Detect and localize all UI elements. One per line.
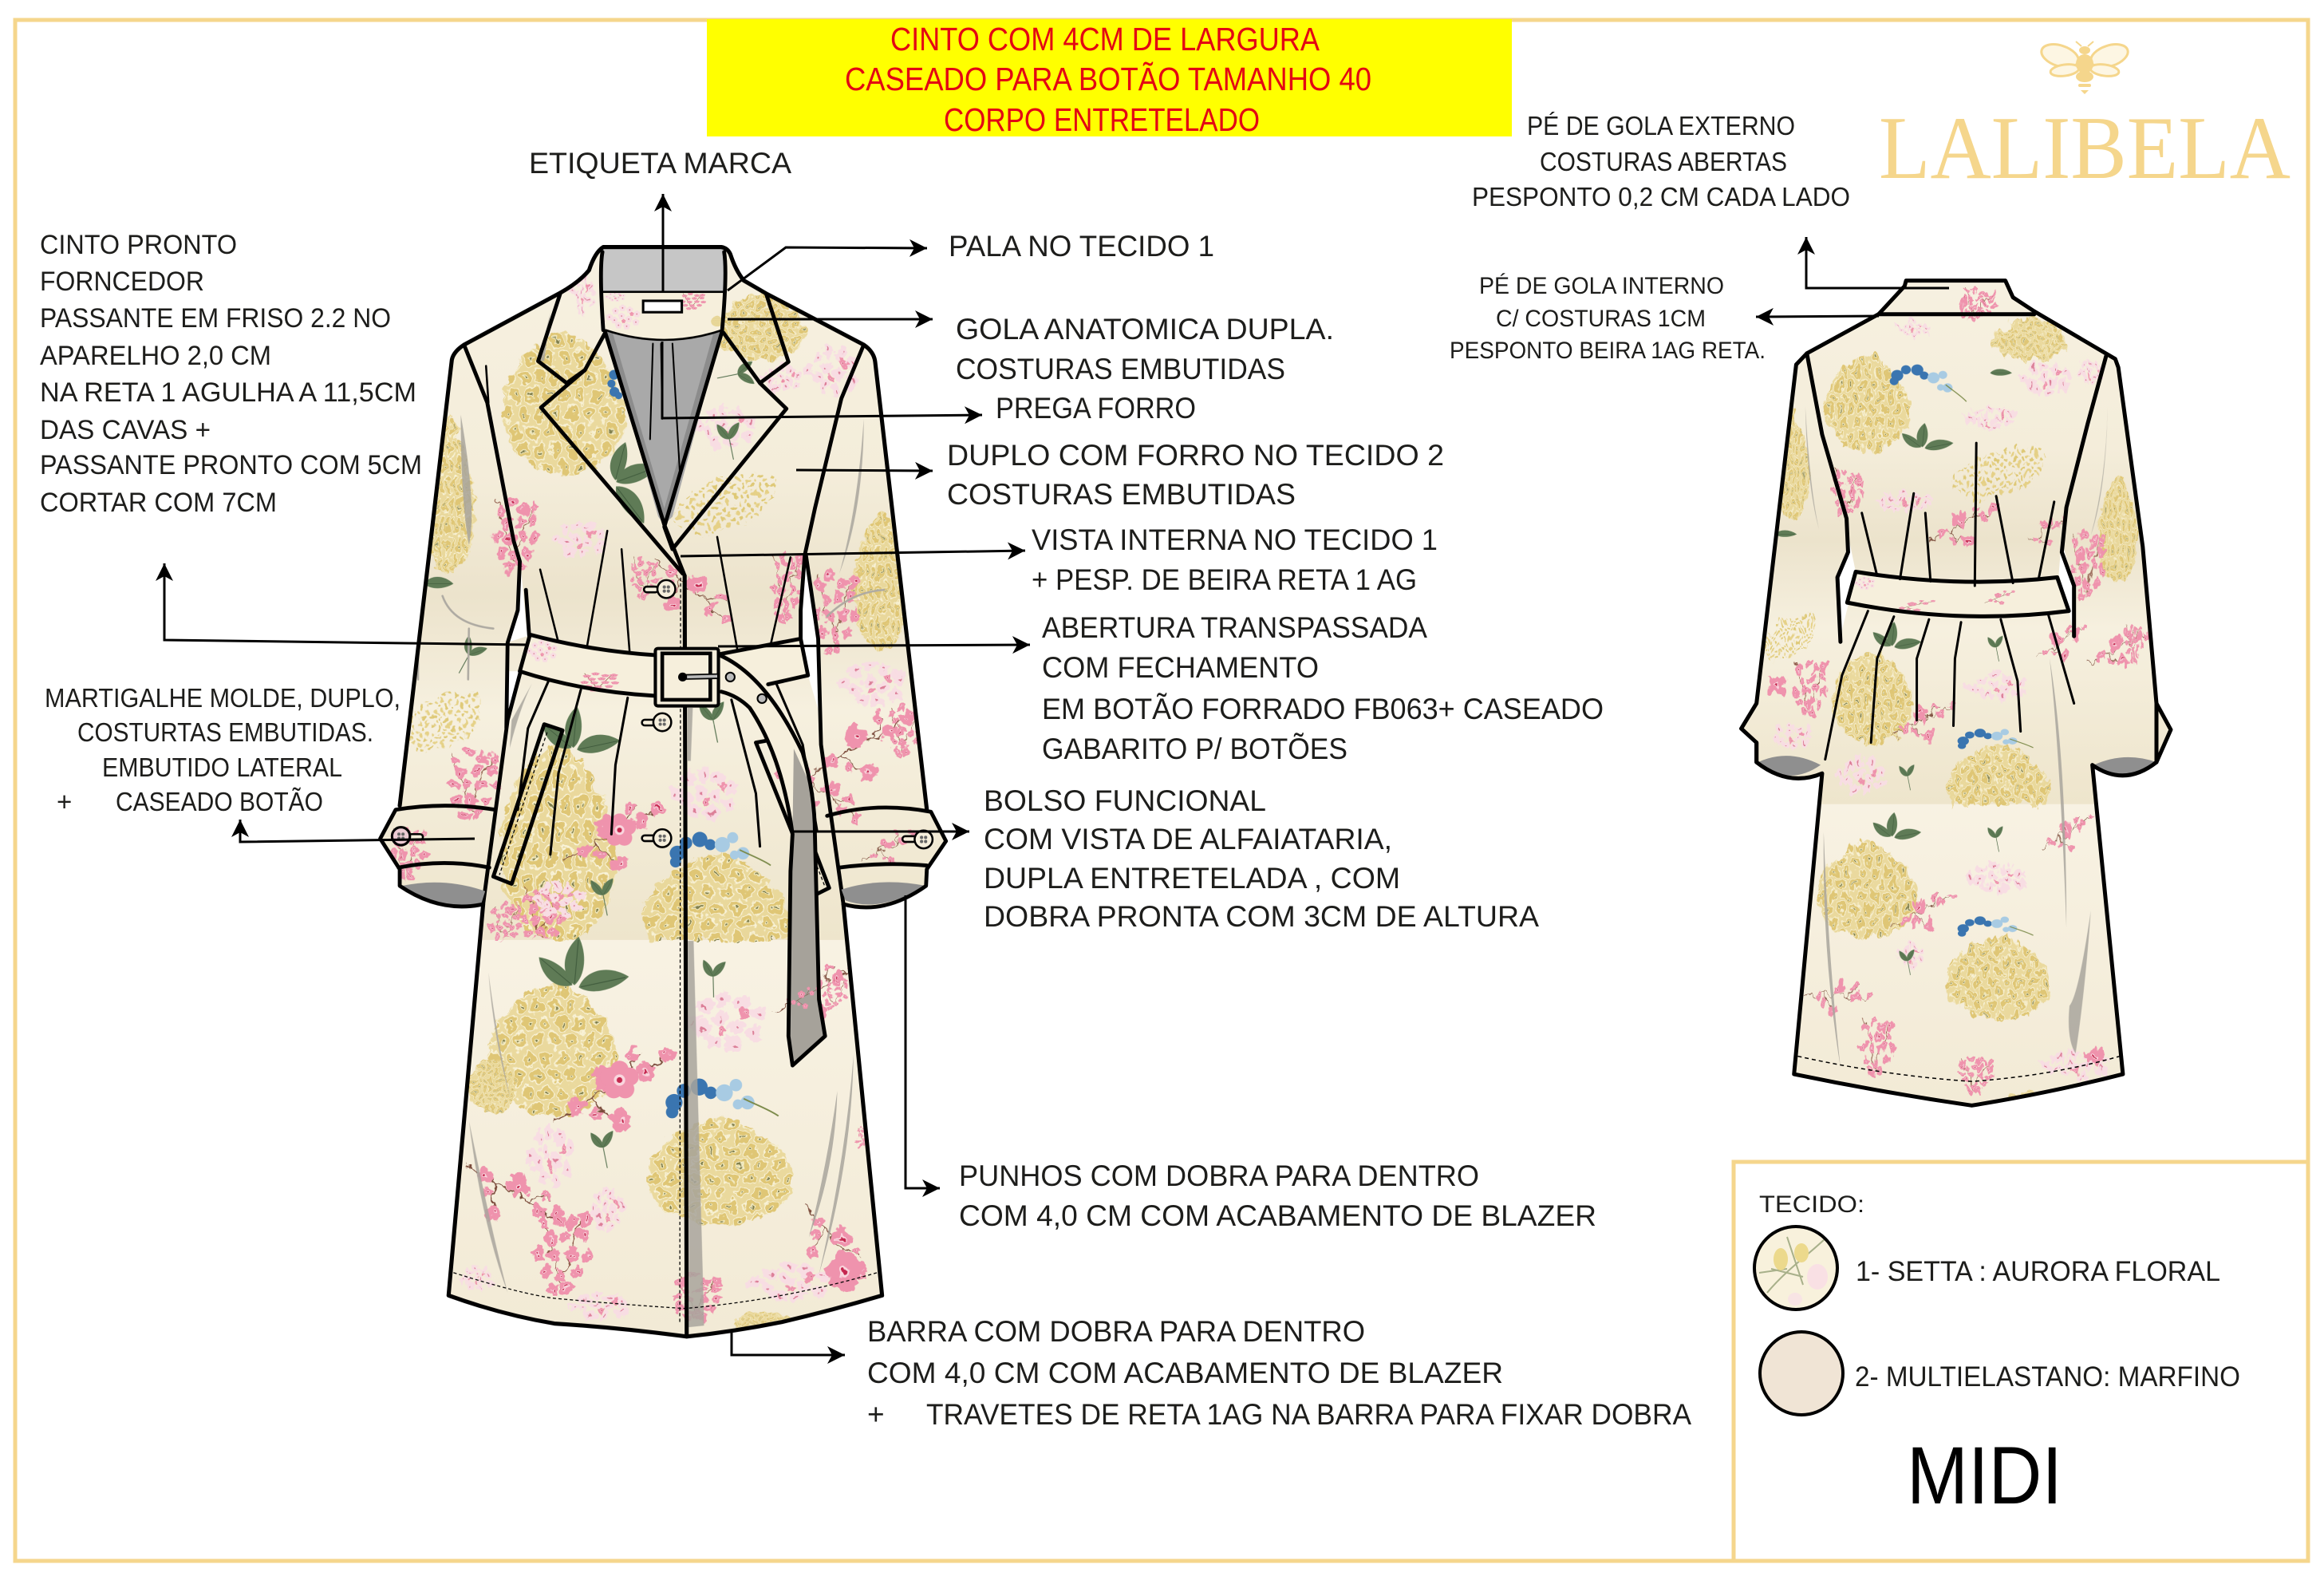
- base fabric: [381, 247, 946, 1337]
- text block: martingale: +: [57, 787, 72, 816]
- text block: cinto pronto: FORNCEDOR: [40, 267, 204, 297]
- arrow: pé de gola externo: [1806, 237, 1949, 288]
- text block: gola anatomica: GOLA ANATOMICA DUPLA.: [956, 313, 1334, 346]
- text block: abertura transpassada: ABERTURA TRANSPASSADA: [1042, 611, 1427, 644]
- text block: vista interna: [1032, 523, 1438, 596]
- text block: vista interna: VISTA INTERNA NO TECIDO 1: [1032, 523, 1438, 556]
- label: etiqueta marca: ETIQUETA MARCA: [529, 147, 791, 180]
- arrow: gola: [728, 318, 933, 321]
- text block: bolso funcional: BOLSO FUNCIONAL: [984, 784, 1266, 817]
- text block: bolso funcional: [984, 784, 1539, 933]
- text block: vista interna: + PESP. DE BEIRA RETA 1 AG: [1032, 563, 1417, 596]
- label: pala: PALA NO TECIDO 1: [949, 230, 1214, 263]
- text block: cinto pronto: PASSANTE PRONTO COM 5CM: [40, 450, 422, 480]
- text block: cinto pronto: CINTO PRONTO: [40, 230, 237, 260]
- arrow: prega forro: [662, 342, 982, 418]
- text block: abertura transpassada: COM FECHAMENTO: [1042, 651, 1319, 684]
- arrow: cinto pronto: [164, 563, 528, 645]
- neck interior and lining: [602, 249, 725, 527]
- text block: pé de gola externo: [1472, 111, 1850, 211]
- wordmark: LALIBELA: [1879, 99, 2290, 198]
- arrow: abertura transpassada: [718, 645, 1030, 646]
- back garment view: [1739, 279, 2173, 1108]
- front garment view: [359, 223, 969, 1347]
- size label: MIDI: [1907, 1430, 2062, 1521]
- text block: barra: [867, 1315, 1691, 1431]
- yellow note box: CINTO COM 4CM DE LARGURA: [890, 21, 1320, 57]
- floral print on back: [1758, 286, 2159, 1097]
- text block: punhos: PUNHOS COM DOBRA PARA DENTRO: [959, 1159, 1479, 1192]
- text block: cinto pronto: NA RETA 1 AGULHA A 11,5CM: [40, 377, 416, 408]
- legend heading: TECIDO:: [1759, 1191, 1864, 1218]
- text block: abertura transpassada: [1042, 611, 1604, 765]
- text block: punhos: COM 4,0 CM COM ACABAMENTO DE BLAZER: [959, 1199, 1596, 1232]
- text block: martingale: EMBUTIDO LATERAL: [102, 753, 342, 782]
- text block: duplo com forro: COSTURAS EMBUTIDAS: [947, 478, 1296, 511]
- cuffs: [381, 806, 946, 907]
- text block: martingale: CASEADO BOTÃO: [116, 787, 323, 816]
- belt buckle: [655, 649, 720, 706]
- yellow note box: [707, 19, 1512, 138]
- text block: gola anatomica: [956, 313, 1334, 385]
- belt tail: [720, 655, 825, 1065]
- arrow: barra: [732, 1329, 845, 1355]
- belt: [520, 634, 808, 696]
- text block: pé de gola interno: [1450, 273, 1766, 364]
- text block: cinto pronto: PASSANTE EM FRISO 2.2 NO: [40, 303, 391, 334]
- text block: abertura transpassada: EM BOTÃO FORRADO FB063+ CASEADO: [1042, 693, 1604, 725]
- text block: barra: +: [867, 1398, 885, 1431]
- lapels: [538, 252, 788, 575]
- back sleeve gaps: [1837, 535, 2074, 636]
- yellow note box: CASEADO PARA BOTÃO TAMANHO 40: [845, 61, 1371, 97]
- text block: pé de gola interno: C/ COSTURAS 1CM: [1496, 306, 1706, 332]
- garment seams and darts: [464, 345, 864, 904]
- text block: pé de gola interno: PESPONTO BEIRA 1AG RETA.: [1450, 338, 1766, 364]
- arrow: bolso: [792, 830, 969, 833]
- back seams: [1757, 314, 2156, 1081]
- arrow: punhos: [906, 895, 940, 1188]
- text block: pé de gola interno: PÉ DE GOLA INTERNO: [1479, 273, 1724, 299]
- floral print on front: [391, 276, 925, 1328]
- text block: bolso funcional: DOBRA PRONTA COM 3CM DE ALTURA: [984, 900, 1539, 933]
- pockets: [493, 725, 829, 894]
- text block: bolso funcional: COM VISTA DE ALFAIATARIA,: [984, 823, 1392, 855]
- swatch label 2: 2- MULTIELASTANO: MARFINO: [1855, 1361, 2240, 1393]
- text block: cinto pronto: CORTAR COM 7CM: [40, 488, 277, 518]
- text block: duplo com forro: [947, 439, 1444, 511]
- text block: punhos: [959, 1159, 1596, 1232]
- swatch: floral fabric: [1754, 1226, 1838, 1310]
- panel: fabric legend: [1734, 1162, 2308, 1561]
- text block: martingale: COSTURTAS EMBUTIDAS.: [77, 717, 373, 747]
- back silhouette outline: [1742, 281, 2171, 1105]
- text block: barra: COM 4,0 CM COM ACABAMENTO DE BLAZER: [867, 1357, 1503, 1389]
- text block: bolso funcional: DUPLA ENTRETELADA , COM: [984, 862, 1400, 895]
- text block: pé de gola externo: COSTURAS ABERTAS: [1540, 147, 1787, 176]
- center front placket: [680, 575, 687, 1337]
- arrow: pé de gola interno: [1756, 316, 1879, 317]
- arrow: vista interna: [681, 551, 1025, 556]
- text block: cinto pronto: [40, 230, 422, 518]
- back belt: [1847, 572, 2069, 616]
- icon: bee: [2038, 40, 2131, 94]
- sleeve-body gaps: [507, 555, 820, 722]
- front silhouette outline: [400, 247, 927, 1337]
- back cuffs: [1758, 756, 2156, 776]
- yellow note box: CORPO ENTRETELADO: [944, 101, 1260, 138]
- hem stitching: [453, 1272, 880, 1309]
- text block: pé de gola externo: PESPONTO 0,2 CM CADA LADO: [1472, 182, 1850, 211]
- text block: barra: TRAVETES DE RETA 1AG NA BARRA PARA FIXAR DOBRA: [926, 1398, 1691, 1431]
- text block: martingale: [45, 683, 400, 816]
- arrow: martingale: [240, 820, 475, 842]
- label: prega forro: PREGA FORRO: [996, 392, 1196, 425]
- brand logo: [1879, 40, 2290, 198]
- text block: cinto pronto: DAS CAVAS +: [40, 415, 211, 445]
- buttons: [392, 580, 933, 848]
- collar back band and brand label: [602, 292, 724, 340]
- arrow: pala: [728, 247, 927, 290]
- arrow: etiqueta marca: [662, 194, 664, 293]
- swatch: marfim fabric: [1760, 1332, 1843, 1415]
- text block: martingale: MARTIGALHE MOLDE, DUPLO,: [45, 683, 400, 713]
- text block: cinto pronto: APARELHO 2,0 CM: [40, 341, 271, 371]
- base fabric back: [1742, 281, 2171, 1105]
- text block: pé de gola externo: PÉ DE GOLA EXTERNO: [1527, 111, 1795, 140]
- arrow: duplo com forro: [796, 470, 933, 471]
- text block: gola anatomica: COSTURAS EMBUTIDAS: [956, 353, 1285, 385]
- swatch label 1: 1- SETTA : AURORA FLORAL: [1856, 1256, 2220, 1287]
- text block: barra: BARRA COM DOBRA PARA DENTRO: [867, 1315, 1365, 1348]
- text block: duplo com forro: DUPLO COM FORRO NO TECIDO 2: [947, 439, 1444, 472]
- text block: abertura transpassada: GABARITO P/ BOTÕES: [1042, 733, 1347, 765]
